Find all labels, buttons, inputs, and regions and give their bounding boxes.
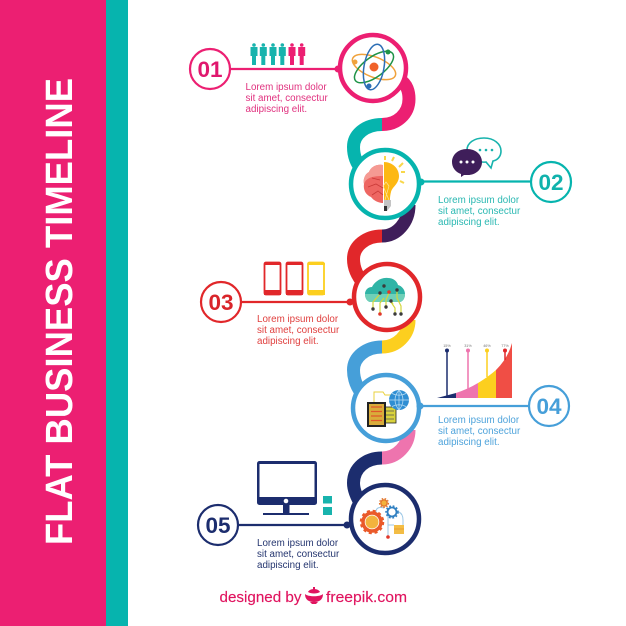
icon: people	[250, 43, 305, 65]
step 02 text: sit amet, consectur	[438, 206, 521, 217]
step 01 text: adipiscing elit.	[246, 104, 307, 115]
step 02 number: 02	[538, 170, 564, 195]
step 03 number: 03	[208, 290, 234, 315]
icon: area chart	[437, 343, 512, 398]
step 05 connector	[239, 524, 347, 526]
icon: area chart: 31%	[464, 344, 472, 348]
step 03 main circle	[354, 264, 420, 330]
step 05 text: Lorem ipsum dolor	[257, 538, 339, 549]
step 01 number: 01	[197, 57, 223, 82]
step 01 text: sit amet, consectur	[246, 93, 328, 104]
step 04 number: 04	[536, 394, 562, 419]
icon: chat bubbles	[452, 138, 501, 177]
step 04 connector	[420, 405, 528, 407]
icon: atom	[349, 43, 399, 91]
icon: cloud network	[365, 278, 405, 316]
step 04 text: Lorem ipsum dolor	[438, 415, 520, 426]
step 01 number	[190, 49, 230, 89]
icon: teal squares	[323, 496, 332, 515]
step 03 junction	[346, 298, 354, 306]
step 02 connector	[421, 180, 530, 183]
step 05 text: adipiscing elit.	[257, 560, 319, 571]
icon: area chart: 77%	[501, 344, 509, 348]
icon: freepik logo	[305, 587, 323, 604]
attribution footer	[220, 587, 407, 606]
icon: servers and globe	[367, 390, 409, 427]
step 03 number	[201, 282, 241, 322]
step 01 text: Lorem ipsum dolor	[246, 82, 327, 93]
step 01	[190, 35, 406, 115]
step 01 main circle	[340, 35, 406, 101]
step 05	[198, 461, 419, 571]
step 04 text: adipiscing elit.	[438, 437, 500, 448]
step 05 main circle	[351, 485, 419, 553]
step 01 junction	[334, 66, 342, 72]
freepik label: freepik.com	[326, 589, 407, 606]
step 04 number	[529, 386, 569, 426]
step 05 text: sit amet, consectur	[257, 549, 340, 560]
title: FLAT BUSINESS TIMELINE	[39, 78, 81, 545]
icon: gears	[361, 498, 404, 539]
step 04 junction	[416, 402, 424, 410]
icon: brain and bulb	[364, 156, 405, 211]
step 03 text: adipiscing elit.	[257, 336, 319, 347]
icon: desktop monitor	[257, 461, 317, 515]
step 02	[351, 138, 571, 228]
step 05 number	[198, 505, 238, 545]
step 05 number: 05	[205, 513, 231, 538]
step 04 text: sit amet, consectur	[438, 426, 521, 437]
step 02 number	[531, 162, 571, 202]
step 02 text: Lorem ipsum dolor	[438, 195, 520, 206]
step 04 main circle	[353, 375, 419, 441]
icon: phones	[264, 262, 325, 295]
step 02 junction	[418, 178, 424, 186]
step 04	[353, 343, 569, 448]
step 03	[201, 262, 420, 347]
icon: area chart: 15%	[443, 344, 451, 348]
step 03 text: Lorem ipsum dolor	[257, 314, 339, 325]
step 03 connector	[242, 301, 350, 303]
step 01 connector	[231, 68, 338, 70]
step 02 main circle	[351, 150, 419, 218]
step 03 text: sit amet, consectur	[257, 325, 340, 336]
step 05 junction	[344, 522, 350, 528]
winding timeline ribbon	[354, 80, 409, 506]
panel: left title sidebar	[0, 0, 128, 626]
icon: area chart: 46%	[483, 344, 491, 348]
step 02 text: adipiscing elit.	[438, 217, 500, 228]
designed by label: designed by	[220, 589, 302, 606]
